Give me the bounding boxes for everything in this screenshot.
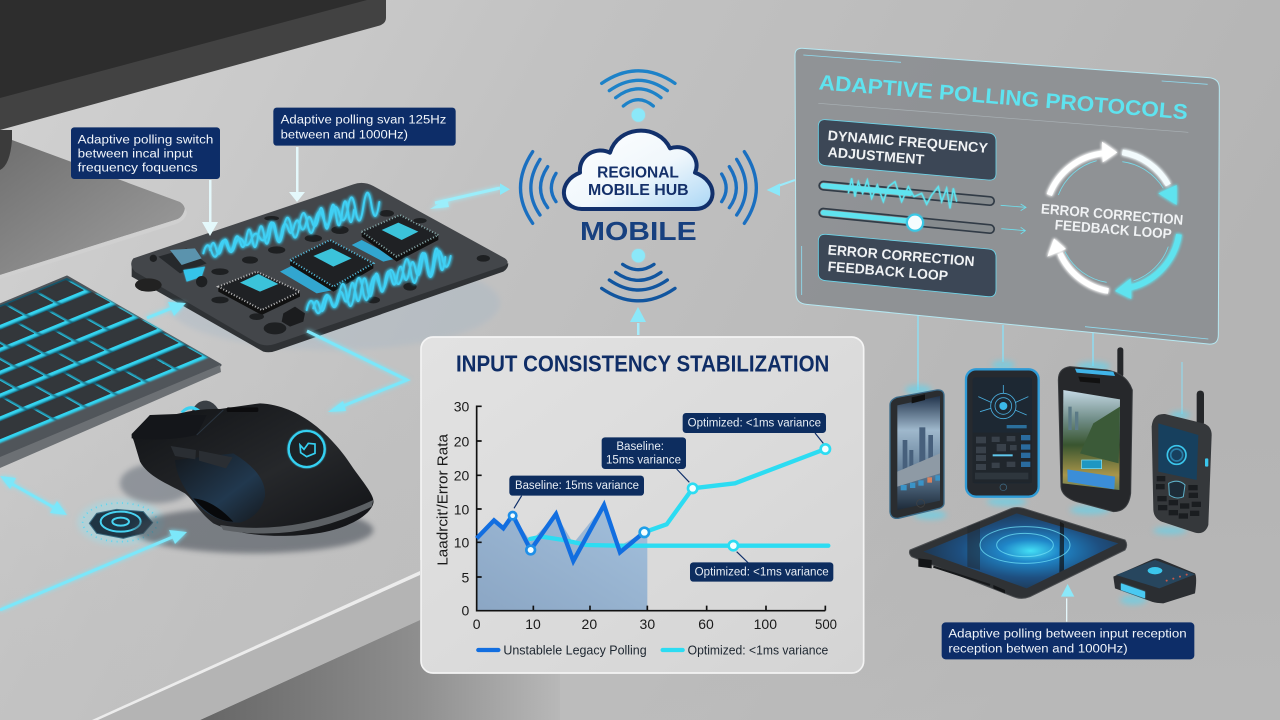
arrows: left side signal flow bbox=[0, 147, 795, 610]
regional mobile hub bbox=[500, 71, 780, 301]
callout: baseline left: Baseline: 15ms variance bbox=[515, 478, 639, 492]
regional mobile hub: MOBILE bbox=[580, 216, 697, 246]
callout: adaptive polling switch bbox=[71, 127, 220, 179]
frequency slider tracks bbox=[823, 178, 990, 231]
callout: optimized top: Optimized: <1ms variance bbox=[688, 415, 821, 429]
regional mobile hub: MOBILE HUB bbox=[588, 182, 689, 199]
y axis tick labels: 10 bbox=[454, 501, 470, 517]
portable hub device bbox=[1113, 558, 1196, 603]
callout: adaptive polling switch: between incal input bbox=[78, 146, 193, 160]
axes bbox=[477, 406, 825, 611]
chart title: INPUT CONSISTENCY STABILIZATION bbox=[456, 350, 829, 376]
callout: adaptive polling span: between and 1000Hz) bbox=[281, 127, 408, 141]
phone: keypad handset bbox=[1152, 391, 1212, 533]
y axis tick labels: 30 bbox=[454, 399, 470, 415]
error correction box: FEEDBACK LOOP bbox=[827, 258, 949, 284]
y axis title: Laadrcit'/Error Rata bbox=[436, 433, 452, 566]
callout: optimized bottom bbox=[690, 562, 833, 582]
feedback loop ring bbox=[1047, 142, 1179, 299]
callout: optimized top bbox=[683, 413, 826, 433]
phone: rugged landscape screen bbox=[1058, 347, 1132, 512]
callout: adaptive polling reception bbox=[942, 622, 1194, 659]
device group bbox=[890, 347, 1212, 659]
phone: control screen bbox=[966, 369, 1039, 497]
panel title: ADAPTIVE POLLING PROTOCOLS bbox=[818, 70, 1189, 124]
phone: city screen bbox=[890, 390, 944, 518]
y axis tick labels: 20 bbox=[454, 468, 470, 484]
y axis tick labels: 20 bbox=[454, 433, 470, 449]
optimized flat line bbox=[530, 537, 828, 546]
error correction box bbox=[818, 234, 996, 297]
dynamic frequency box: ADJUSTMENT bbox=[827, 144, 925, 167]
leader lines bbox=[514, 433, 823, 563]
data markers bbox=[509, 444, 830, 554]
x axis tick labels: 100 bbox=[754, 616, 777, 632]
callout: adaptive polling reception: reception betwen and 1000Hz) bbox=[948, 641, 1128, 655]
x axis tick labels bbox=[473, 616, 837, 632]
panel: adaptive polling protocols bbox=[795, 48, 1219, 344]
connector lines to devices bbox=[918, 315, 1182, 414]
callout: baseline middle bbox=[602, 437, 686, 469]
x axis tick labels: 30 bbox=[640, 616, 655, 632]
error correction box: ERROR CORRECTION bbox=[827, 241, 975, 269]
loop label bbox=[1040, 200, 1184, 242]
x axis tick labels: 10 bbox=[525, 616, 541, 632]
y axis tick labels: 10 bbox=[454, 535, 470, 551]
y axis tick labels bbox=[454, 399, 470, 619]
signal waveforms bbox=[203, 193, 451, 313]
callout: baseline middle: 15ms variance bbox=[606, 452, 681, 466]
callout: adaptive polling switch: frequency foquencs bbox=[78, 160, 198, 174]
callout: baseline left bbox=[509, 476, 644, 496]
callout: adaptive polling span: Adaptive polling svan 125Hz bbox=[281, 112, 446, 126]
x axis tick labels: 20 bbox=[582, 616, 597, 632]
callout: optimized bottom: Optimized: <1ms variance bbox=[695, 565, 829, 579]
legend: Optimized: <1ms variance bbox=[688, 643, 828, 657]
regional mobile hub: REGIONAL bbox=[597, 164, 679, 181]
wireless pad bbox=[77, 499, 164, 546]
arrow to tablet bbox=[1065, 598, 1069, 622]
tablet bbox=[909, 507, 1127, 598]
legend bbox=[478, 643, 828, 657]
legacy polling line bbox=[477, 505, 644, 561]
callout: adaptive polling switch: Adaptive polling switch bbox=[78, 132, 213, 146]
cloud bbox=[564, 131, 713, 209]
loop label: FEEDBACK LOOP bbox=[1054, 216, 1172, 242]
loop label: ERROR CORRECTION bbox=[1040, 200, 1184, 228]
gaming mouse bbox=[120, 401, 374, 553]
chart area bbox=[477, 505, 647, 611]
callout: adaptive polling reception: Adaptive polling between input reception bbox=[948, 627, 1187, 641]
callout: baseline middle: Baseline: bbox=[616, 439, 664, 453]
panel: input consistency chart bbox=[421, 337, 864, 673]
dynamic frequency box bbox=[818, 120, 996, 180]
legend: Unstablele Legacy Polling bbox=[503, 643, 647, 657]
monitor and stand bbox=[0, 0, 386, 279]
small arrows to loop bbox=[1001, 204, 1026, 234]
y axis tick labels: 5 bbox=[462, 569, 470, 585]
dynamic frequency box: DYNAMIC FREQUENCY bbox=[827, 127, 989, 156]
small components bbox=[150, 210, 490, 334]
keyboard bbox=[0, 277, 221, 468]
optimized rising line bbox=[644, 449, 825, 532]
circuit board bbox=[131, 183, 508, 352]
wireless arcs bbox=[520, 71, 756, 301]
x axis tick labels: 0 bbox=[473, 616, 481, 632]
y axis tick labels: 0 bbox=[462, 603, 470, 619]
x axis tick labels: 60 bbox=[698, 616, 714, 632]
x axis tick labels: 500 bbox=[815, 616, 837, 632]
microchips bbox=[158, 215, 438, 327]
callout: adaptive polling span bbox=[273, 108, 456, 146]
